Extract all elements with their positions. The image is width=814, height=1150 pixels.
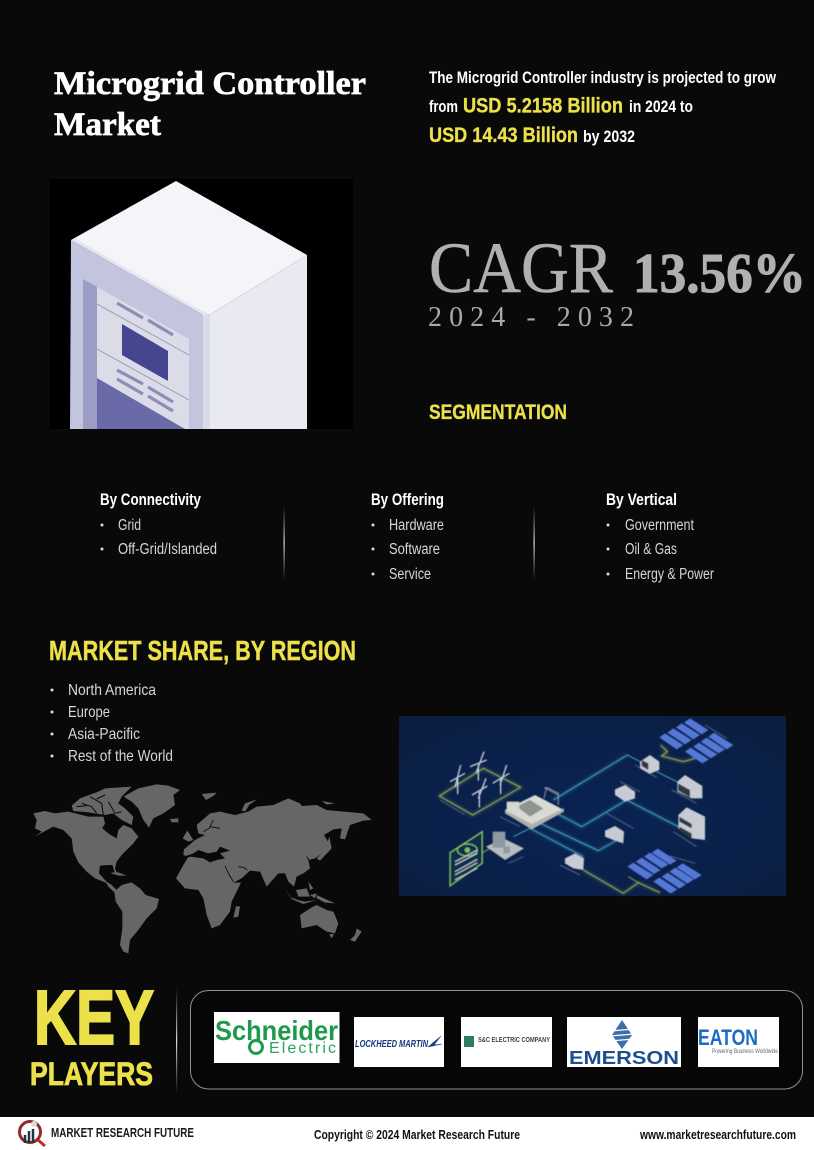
title: Market [54, 107, 161, 143]
logo: Eaton: Powering Business Worldwide [712, 1048, 778, 1055]
segment: by vertical: Energy & Power [625, 566, 714, 583]
market size statement: from [429, 98, 458, 116]
market size statement: USD 5.2158 Billion [463, 94, 623, 118]
segment: by vertical: Government [625, 517, 695, 534]
segment: by offering: Hardware [389, 517, 444, 534]
logo: Schneider Electric [214, 1012, 340, 1063]
logo: Emerson: EMERSON [569, 1047, 679, 1068]
footer: MARKET RESEARCH FUTURE [51, 1125, 194, 1140]
logo: Lockheed Martin [354, 1017, 444, 1067]
heading: segmentation: SEGMENTATION [429, 401, 567, 424]
heading: key players: KEY [34, 975, 154, 1061]
region list: Rest of the World [68, 748, 173, 765]
glow layer [439, 745, 695, 893]
market size statement: by 2032 [583, 128, 635, 146]
heading: key players: PLAYERS [30, 1056, 153, 1092]
logo: Emerson [567, 1017, 681, 1068]
icon: isometric server cabinet [50, 179, 353, 429]
logo: Eaton: EATON [698, 1025, 758, 1050]
region list: Asia-Pacific [68, 726, 140, 743]
heading: market share by region: MARKET SHARE, BY REGION [49, 635, 356, 666]
CAGR figure: 13.56% [633, 243, 806, 305]
CAGR figure [428, 228, 806, 333]
segment: by connectivity [100, 491, 217, 558]
market size statement [429, 69, 776, 147]
segment: by connectivity: Off-Grid/Islanded [118, 541, 217, 558]
icon: market research future logo [20, 1121, 45, 1146]
segment: by offering: By Offering [371, 491, 444, 509]
segment: by offering: Software [389, 541, 440, 558]
segment: by vertical: By Vertical [606, 491, 677, 509]
logo: Schneider Electric: Electric [269, 1040, 336, 1057]
logo: Eaton [698, 1017, 779, 1067]
footer [0, 1117, 814, 1150]
panel: key player logos [190, 990, 802, 1089]
heading: key players [30, 975, 154, 1092]
title [54, 66, 366, 143]
segment: by offering [371, 491, 444, 583]
world map [33, 784, 372, 953]
network diagram: microgrid layout [399, 716, 786, 896]
title: Microgrid Controller [54, 66, 366, 102]
segment: by connectivity: By Connectivity [100, 491, 202, 509]
segment: by offering: Service [389, 566, 431, 583]
CAGR figure: CAGR [429, 228, 613, 308]
segment: by vertical [606, 491, 714, 583]
CAGR figure: 2024 - 2032 [428, 302, 634, 333]
logo: Schneider Electric: Schneider [215, 1015, 338, 1046]
footer: Copyright © 2024 Market Research Future [314, 1127, 520, 1142]
segment: by connectivity: Grid [118, 517, 141, 534]
region list [50, 682, 173, 765]
logo: S&C Electric Company [461, 1017, 552, 1067]
logo: S&C Electric Company: S&C ELECTRIC COMPANY [478, 1035, 550, 1044]
logo: Lockheed Martin: LOCKHEED MARTIN [355, 1038, 428, 1050]
market size statement: USD 14.43 Billion [429, 124, 578, 147]
region list: North America [68, 682, 156, 699]
region list: Europe [68, 704, 110, 721]
segment: by vertical: Oil & Gas [625, 541, 677, 558]
market size statement: in 2024 to [629, 98, 693, 116]
